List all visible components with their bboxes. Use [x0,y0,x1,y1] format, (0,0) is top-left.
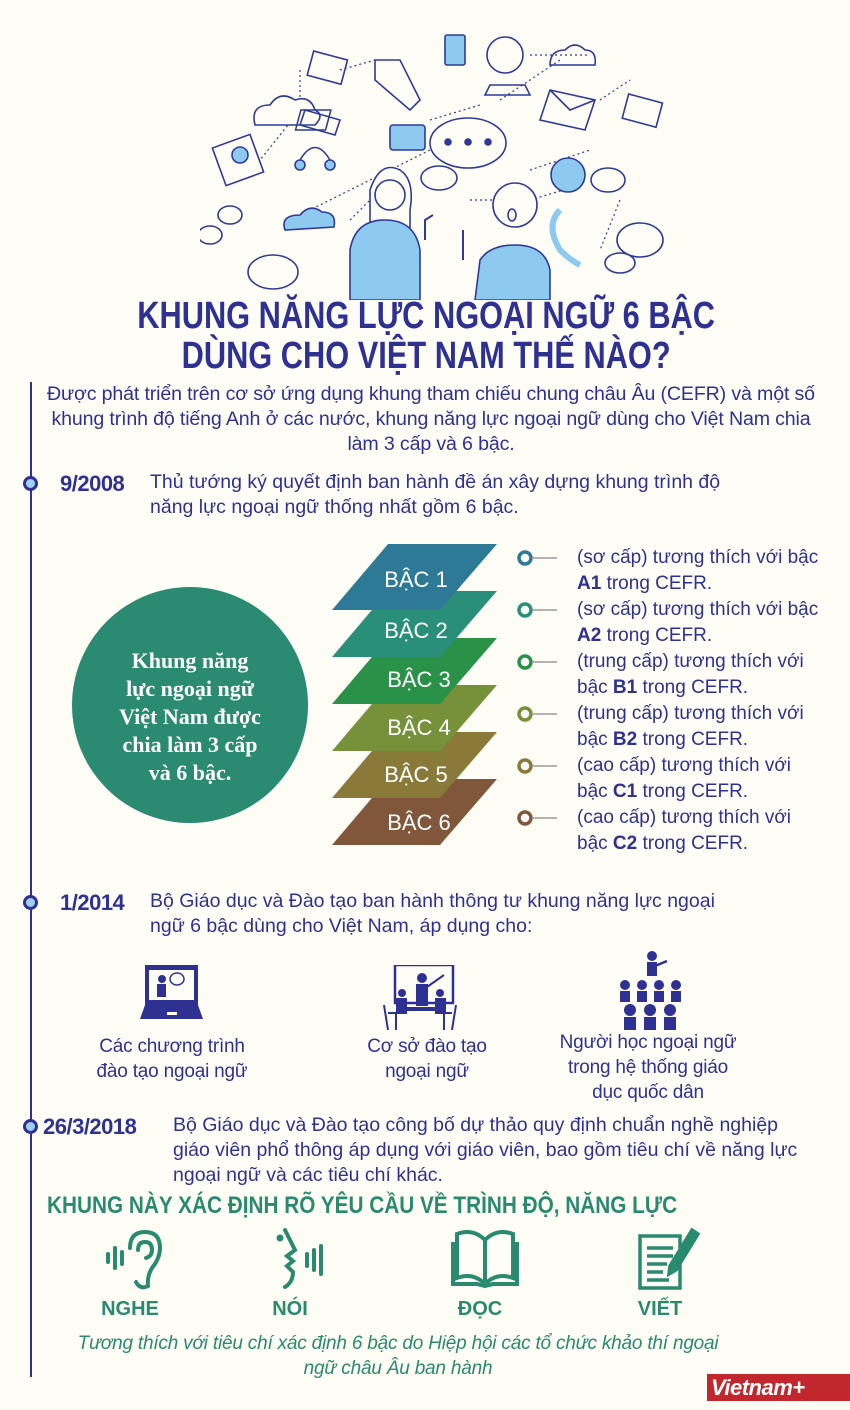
legend list: bậc B1 trong CEFR. [577,677,748,698]
event 2018: ngoại ngữ và các tiêu chí khác. [173,1164,443,1186]
event 2014: ngữ 6 bậc dùng cho Việt Nam, áp dụng cho: [150,915,532,937]
stacked levels: BẬC 5 [384,762,448,787]
legend list: (cao cấp) tương thích với [577,807,791,828]
legend list: A2 trong CEFR. [577,625,712,646]
stacked levels: BẬC 4 [387,715,451,740]
italic note [78,1333,719,1379]
event 2018 [23,1114,797,1186]
icon: laptop [140,965,203,1019]
legend list: (trung cấp) tương thích với [577,703,804,724]
title [137,294,715,377]
skills icons: VIẾT [638,1298,682,1320]
label: institutions [367,1036,487,1082]
intro paragraph: Được phát triển trên cơ sở ứng dụng khung tham chiếu chung châu Âu (CEFR) và một số [47,383,815,405]
logo: Vietnam+ [707,1374,850,1401]
intro paragraph: làm 3 cấp và 6 bậc. [347,433,515,455]
icon: paper pen VIẾT [638,1228,700,1290]
illustration: people with communication doodles [200,34,664,300]
legend list [517,547,818,854]
label: institutions: Cơ sở đào tạo [367,1036,487,1057]
circle: summary [72,587,308,823]
circle: summary: lực ngoại ngữ [126,676,254,701]
label: programs: Các chương trình [99,1036,245,1057]
event 2014: Bộ Giáo dục và Đào tạo ban hành thông tư khung năng lực ngoại [150,890,715,912]
event 2008: 9/2008 [60,471,124,496]
legend list: (sơ cấp) tương thích với bậc [577,547,818,568]
label: institutions: ngoại ngữ [385,1061,469,1082]
legend list: bậc C1 trong CEFR. [577,781,748,802]
label: learners [560,1032,736,1103]
event 2018: 26/3/2018 [43,1114,136,1139]
icon: face NÓI [276,1228,323,1290]
label: learners: dục quốc dân [592,1082,704,1103]
stacked levels [332,544,497,845]
event 2018: Bộ Giáo dục và Đào tạo công bố dự thảo quy định chuẩn nghề nghiệp [173,1114,778,1136]
icon: classroom [383,965,457,1030]
event 2014: 1/2014 [60,890,124,915]
skills icons: NÓI [272,1298,308,1320]
green heading: KHUNG NÀY XÁC ĐỊNH RÕ YÊU CẦU VỀ TRÌNH ĐỘ, NĂNG LỰC [47,1192,677,1219]
legend list: A1 trong CEFR. [577,573,712,594]
legend list: bậc C2 trong CEFR. [577,833,748,854]
italic note: Tương thích với tiêu chí xác định 6 bậc do Hiệp hội các tổ chức khảo thí ngoại [78,1333,718,1354]
event 2008: Thủ tướng ký quyết định ban hành đề án xây dựng khung trình độ [150,471,720,493]
icon: book ĐỌC [451,1230,519,1288]
skills icons: ĐỌC [458,1298,502,1320]
title: DÙNG CHO VIỆT NAM THẾ NÀO? [182,335,671,377]
skill labels: NGHE [101,1298,159,1320]
label: learners: Người học ngoại ngữ [560,1032,736,1053]
legend list: (sơ cấp) tương thích với bậc [577,599,818,620]
event 2014 [23,890,715,937]
legend list: (trung cấp) tương thích với [577,651,804,672]
intro paragraph: khung trình độ tiếng Anh ở các nước, khung năng lực ngoại ngữ dùng cho Việt Nam chia [51,408,811,430]
stacked levels: BẬC 1 [384,567,448,592]
label: programs [97,1036,247,1082]
stacked levels: BẬC 3 [387,667,451,692]
icon: group of people [620,951,681,1030]
legend list: bậc B2 trong CEFR. [577,729,748,750]
skills icons [101,1228,700,1320]
intro paragraph [47,383,815,455]
legend list: (cao cấp) tương thích với [577,755,791,776]
circle: summary: chia làm 3 cấp [122,732,258,757]
label: programs: đào tạo ngoại ngữ [97,1061,247,1082]
label: learners: trong hệ thống giáo [568,1057,728,1078]
logo: Vietnam+: Vietnam+ [711,1375,805,1400]
circle: summary: Việt Nam được [119,704,261,729]
timeline line [30,382,32,1377]
stacked levels: BẬC 2 [384,618,448,643]
event 2008 [23,471,720,518]
circle: summary: Khung năng [132,648,248,673]
stacked levels: BẬC 6 [387,810,451,835]
event 2018: giáo viên phổ thông áp dụng với giáo viên, bao gồm tiêu chí về năng lực [173,1139,797,1161]
event 2008: năng lực ngoại ngữ thống nhất gồm 6 bậc. [150,496,519,518]
title: KHUNG NĂNG LỰC NGOẠI NGỮ 6 BẬC [137,295,715,337]
italic note: ngữ châu Âu ban hành [304,1358,492,1379]
icon: ear NGHE [106,1230,162,1290]
circle: summary: và 6 bậc. [149,760,231,785]
